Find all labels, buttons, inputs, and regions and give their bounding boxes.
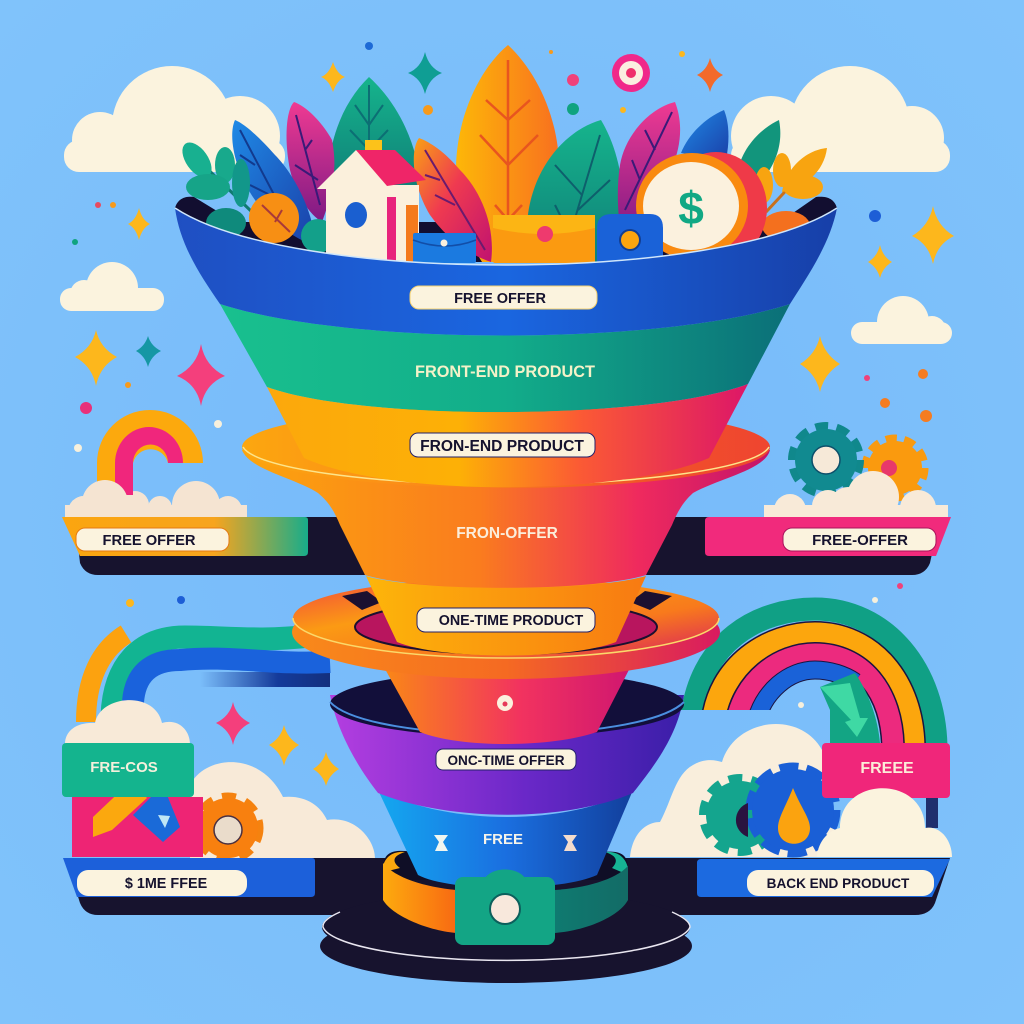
icon: coin — [636, 152, 767, 264]
funnel tier 1: blue rim — [175, 208, 837, 336]
funnel leaves group — [177, 45, 827, 262]
lower shelf dark bar — [66, 858, 950, 915]
label: free offer tag left: FREE OFFER — [102, 533, 196, 549]
orange sprig — [755, 148, 827, 241]
funnel tier 4: orange cone with skirt: FRON-OFFER — [456, 525, 558, 542]
label: free offer: FREE OFFER — [454, 291, 546, 307]
lower left clouds — [65, 700, 375, 858]
funnel tier 2: green: FRONT-END PRODUCT — [415, 363, 595, 381]
funnel flare 2 — [292, 578, 720, 679]
icon: gears and droplet — [704, 768, 835, 852]
panel: free-cos tag — [62, 743, 194, 797]
cloud on right shelf — [764, 471, 948, 526]
green sprig — [177, 137, 252, 238]
cloud on left shelf — [65, 480, 247, 529]
icon: target — [612, 54, 650, 92]
label: fron-end product: FRON-END PRODUCT — [420, 438, 584, 455]
label: free offer tag left — [62, 517, 308, 556]
cloud mid left — [60, 262, 164, 314]
label: $ time fee shelf: $ 1ME FFEE — [125, 876, 208, 892]
label: back end shelf: BACK END PRODUCT — [767, 876, 910, 891]
label: one-time offer: ONC-TIME OFFER — [447, 753, 565, 768]
cloud front of arch — [68, 480, 128, 528]
panel: free-cos tag: FRE-COS — [90, 759, 158, 776]
lower right cloud front — [817, 788, 952, 857]
funnel tier 8: blue spout — [378, 790, 633, 888]
lower right clouds back — [630, 724, 840, 857]
left pipe rainbow — [86, 634, 330, 722]
base platform — [320, 891, 692, 983]
dark strip behind tag — [926, 798, 938, 828]
ring top edges — [383, 852, 628, 874]
funnel tier 5: one-time product — [366, 576, 646, 656]
funnel tier 2: green — [220, 304, 790, 412]
right rainbow — [691, 609, 936, 750]
funnel tier 6: red cone — [380, 660, 634, 744]
icon: gears right — [793, 427, 924, 497]
icon: green down arrow — [820, 673, 880, 743]
icon: orange arch — [97, 410, 203, 495]
cloud top left — [64, 66, 285, 172]
funnel inner dark ends — [175, 197, 837, 262]
funnel flare 1 — [242, 406, 770, 488]
label: free-offer tag right: FREE-OFFER — [812, 532, 908, 549]
label: free-offer tag right — [705, 517, 951, 556]
funnel tier 4: orange cone with skirt — [242, 450, 770, 588]
label: one-time offer — [436, 749, 576, 770]
icon: orange gear lower left — [197, 797, 259, 859]
icon: envelopes — [413, 214, 663, 263]
cloud top right — [731, 66, 950, 172]
base ring back — [383, 851, 628, 880]
funnel tier 3: orange — [267, 384, 748, 487]
cloud mid right — [851, 296, 952, 348]
icon: camera — [455, 870, 555, 945]
label: free offer — [410, 286, 597, 309]
lower funnel cup — [330, 671, 684, 815]
base ring front — [383, 863, 628, 933]
panel: freee tag: FREEE — [860, 760, 914, 777]
sparkles and dots — [72, 42, 954, 786]
icon: coin: $ — [678, 182, 704, 234]
label: $ time fee shelf — [63, 858, 315, 897]
funnel tier 5: one-time product: ONE-TIME PRODUCT — [439, 613, 584, 629]
upper shelf dark bar — [75, 517, 940, 575]
label: back end shelf — [697, 859, 950, 897]
icon: house — [317, 140, 426, 262]
panel: pink box with arrows — [72, 782, 203, 857]
funnel tier 8: blue spout: FREE — [483, 831, 523, 848]
panel: freee tag — [822, 743, 950, 798]
label: fron-end product — [410, 433, 595, 457]
